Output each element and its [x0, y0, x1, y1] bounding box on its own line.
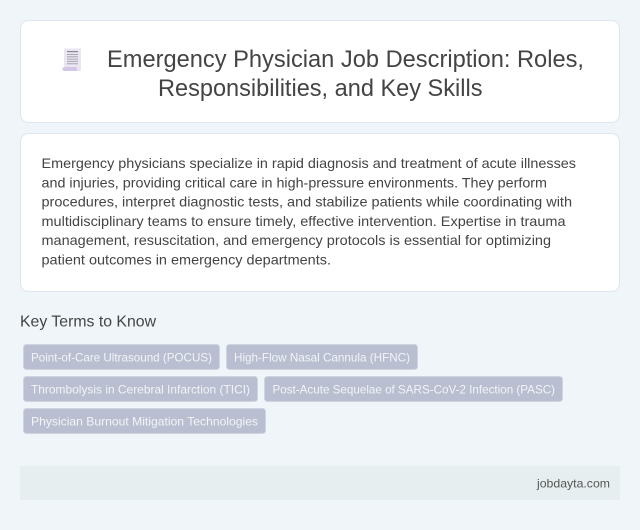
text block: description: patient outcomes in emergency departments. — [42, 252, 331, 268]
footer: jobdayta.com — [536, 476, 610, 490]
chip: PASC: Post-Acute Sequelae of SARS-CoV-2 Infection (PASC) — [272, 382, 555, 396]
chip: HFNC: High-Flow Nasal Cannula (HFNC) — [234, 350, 410, 364]
text block: description: and injuries, providing critical care in high-pressure environments. They perform — [42, 174, 547, 190]
chip: burnout: Physician Burnout Mitigation Technologies — [31, 414, 258, 428]
key terms chips — [24, 344, 562, 434]
text block: description: Emergency physicians specialize in rapid diagnosis and treatment of acute illnesses — [42, 155, 576, 171]
panel: title card — [20, 20, 620, 122]
title: Responsibilities, and Key Skills — [158, 75, 482, 102]
title: Emergency Physician Job Description: Roles, — [107, 46, 584, 73]
chip: POCUS — [24, 344, 220, 370]
text block: description: procedures, interpret diagnostic tests, and stabilize patients while coordinating with — [42, 194, 572, 210]
heading: key terms: Key Terms to Know — [20, 314, 156, 330]
chip: HFNC — [226, 344, 418, 370]
chip: TICI: Thrombolysis in Cerebral Infarction (TICI) — [31, 382, 250, 396]
title — [107, 46, 584, 102]
chip: burnout — [24, 408, 266, 434]
text block: description: management, resuscitation, and emergency protocols is essential for optimizing — [42, 232, 551, 248]
icon: receipt document — [62, 48, 81, 71]
panel: description card — [20, 134, 620, 292]
chip: TICI — [24, 376, 258, 402]
text block: description: multidisciplinary teams to ensure timely, effective intervention. Expertise in trauma — [42, 213, 566, 229]
chip: POCUS: Point-of-Care Ultrasound (POCUS) — [31, 350, 212, 364]
chip: PASC — [264, 376, 562, 402]
text block: description — [42, 155, 576, 268]
footer — [20, 466, 620, 500]
